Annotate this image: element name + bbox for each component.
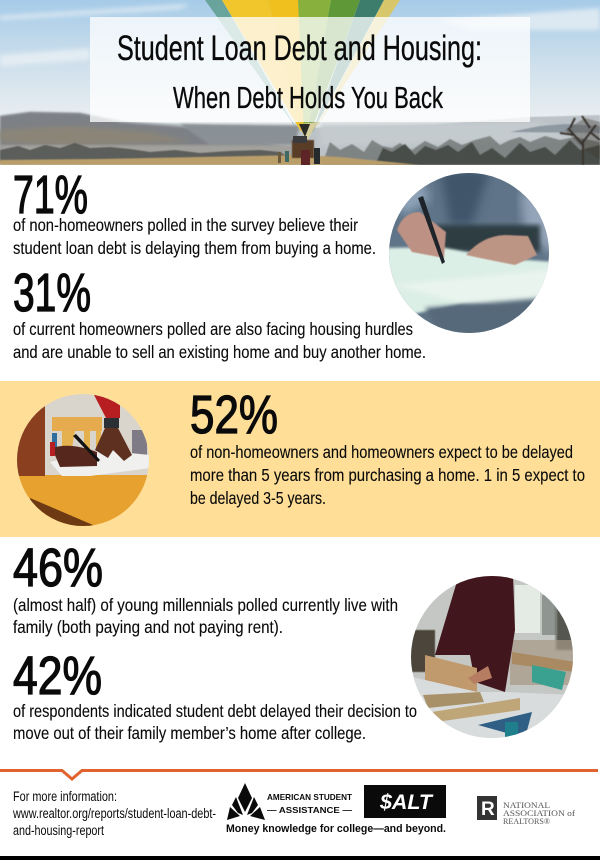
footer divider with chevron: [0, 770, 598, 779]
stat: 71%: 71%: [13, 165, 88, 225]
footer: more information: www.realtor.org/reports/student-loan-debt-: [12, 806, 216, 821]
stat: 71%: [13, 165, 376, 258]
footer: more information: For more information:: [13, 789, 117, 804]
stat: 46%: [13, 538, 398, 637]
tree line: [0, 136, 600, 165]
logo: American Student Assistance: — ASSISTANCE —: [267, 805, 353, 815]
tagline: Money knowledge for college—and beyond.: [226, 823, 446, 835]
logo: National Association of Realtors: ASSOCIATION of: [503, 809, 575, 818]
stat: 31%: [13, 263, 426, 362]
stat: 31%: of current homeowners polled are also facing housing hurdles: [13, 319, 413, 339]
hero photo: hot air balloon over valley: [0, 0, 600, 165]
logo: SALT: $ALT: [379, 791, 434, 814]
logo: National Association of Realtors: [477, 796, 575, 826]
stat: 46%: 46%: [13, 538, 103, 598]
logo: National Association of Realtors: NATIONAL: [503, 801, 550, 810]
bare tree: [560, 116, 600, 165]
dry grass field: [0, 155, 420, 165]
logo: American Student Assistance: AMERICAN STUDENT: [267, 792, 353, 802]
stat: 52%: be delayed 3-5 years.: [190, 488, 326, 508]
footer: more information: and-housing-report: [13, 823, 104, 838]
stat: 52%: [190, 385, 585, 508]
stat: 42%: of respondents indicated student debt delayed their decision to: [13, 701, 417, 721]
photo: hands signing at wooden desk: [15, 390, 151, 532]
yellow band: [0, 381, 600, 537]
title: [117, 29, 482, 115]
logo: American Student Assistance: [227, 783, 353, 820]
photo: person packing a box: [411, 576, 573, 738]
bottom black bar: [0, 856, 600, 860]
stat: 71%: student loan debt is delaying them from buying a home.: [13, 238, 376, 258]
title: When Debt Holds You Back: [173, 80, 443, 115]
stat: 42%: move out of their family member’s home after college.: [13, 723, 366, 743]
stat: 46%: family (both paying and not paying rent).: [13, 617, 283, 637]
balloon basket and crew: [278, 136, 320, 165]
logo: SALT: [364, 785, 446, 818]
balloon envelope: [205, 0, 400, 139]
title panel: [90, 17, 530, 122]
stat: 42%: 42%: [13, 646, 102, 706]
stat: 31%: and are unable to sell an existing home and buy another home.: [13, 342, 426, 362]
stat: 52%: 52%: [190, 385, 278, 445]
stat: 46%: (almost half) of young millennials polled currently live with: [13, 595, 398, 615]
photo: hands writing on paper: [385, 170, 555, 335]
stat: 71%: of non-homeowners polled in the survey believe their: [13, 215, 358, 235]
footer: more information: [12, 789, 216, 838]
logo: National Association of Realtors: R: [481, 799, 495, 820]
stat: 31%: 31%: [13, 263, 91, 323]
stat: 42%: [13, 646, 417, 743]
logo: National Association of Realtors: REALTORS®: [503, 817, 550, 826]
